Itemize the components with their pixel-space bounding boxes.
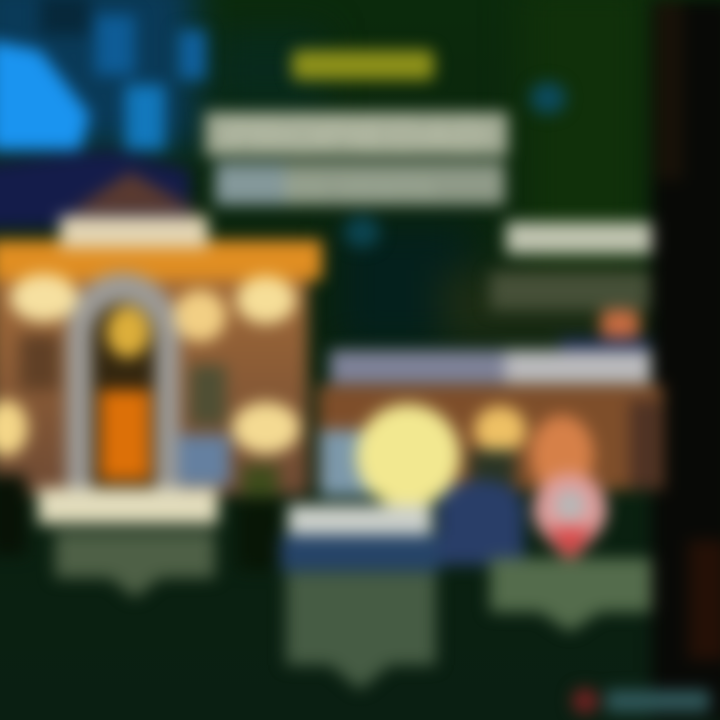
arched window	[106, 306, 150, 358]
orange accent	[600, 301, 640, 349]
steps	[38, 488, 218, 524]
main house	[0, 150, 322, 570]
banner	[330, 350, 651, 384]
wall lamps	[10, 274, 78, 322]
sky patches	[0, 0, 566, 248]
map pin	[533, 473, 607, 562]
title	[205, 111, 508, 207]
small badge	[560, 338, 650, 352]
arched entrance	[66, 272, 180, 490]
title: EN VENTA	[285, 174, 435, 207]
callout heading	[506, 222, 652, 254]
night sky and foliage	[0, 0, 650, 345]
title: PROPIEDAD	[224, 111, 486, 160]
green text panel: right	[490, 558, 652, 632]
white label	[288, 505, 432, 535]
figure	[438, 480, 524, 565]
logo	[572, 688, 710, 714]
tree trunk	[652, 0, 720, 720]
second house	[318, 385, 663, 508]
callout text	[490, 272, 650, 310]
shrubs	[0, 475, 26, 555]
green text panel: left	[55, 532, 215, 598]
side windows	[190, 365, 226, 425]
door	[100, 390, 150, 480]
pediment	[60, 216, 208, 248]
glowing window	[356, 404, 460, 508]
green text panel: centre	[286, 572, 436, 690]
blue strip	[280, 535, 440, 571]
heading badge: PROPIEDAD	[298, 52, 428, 77]
